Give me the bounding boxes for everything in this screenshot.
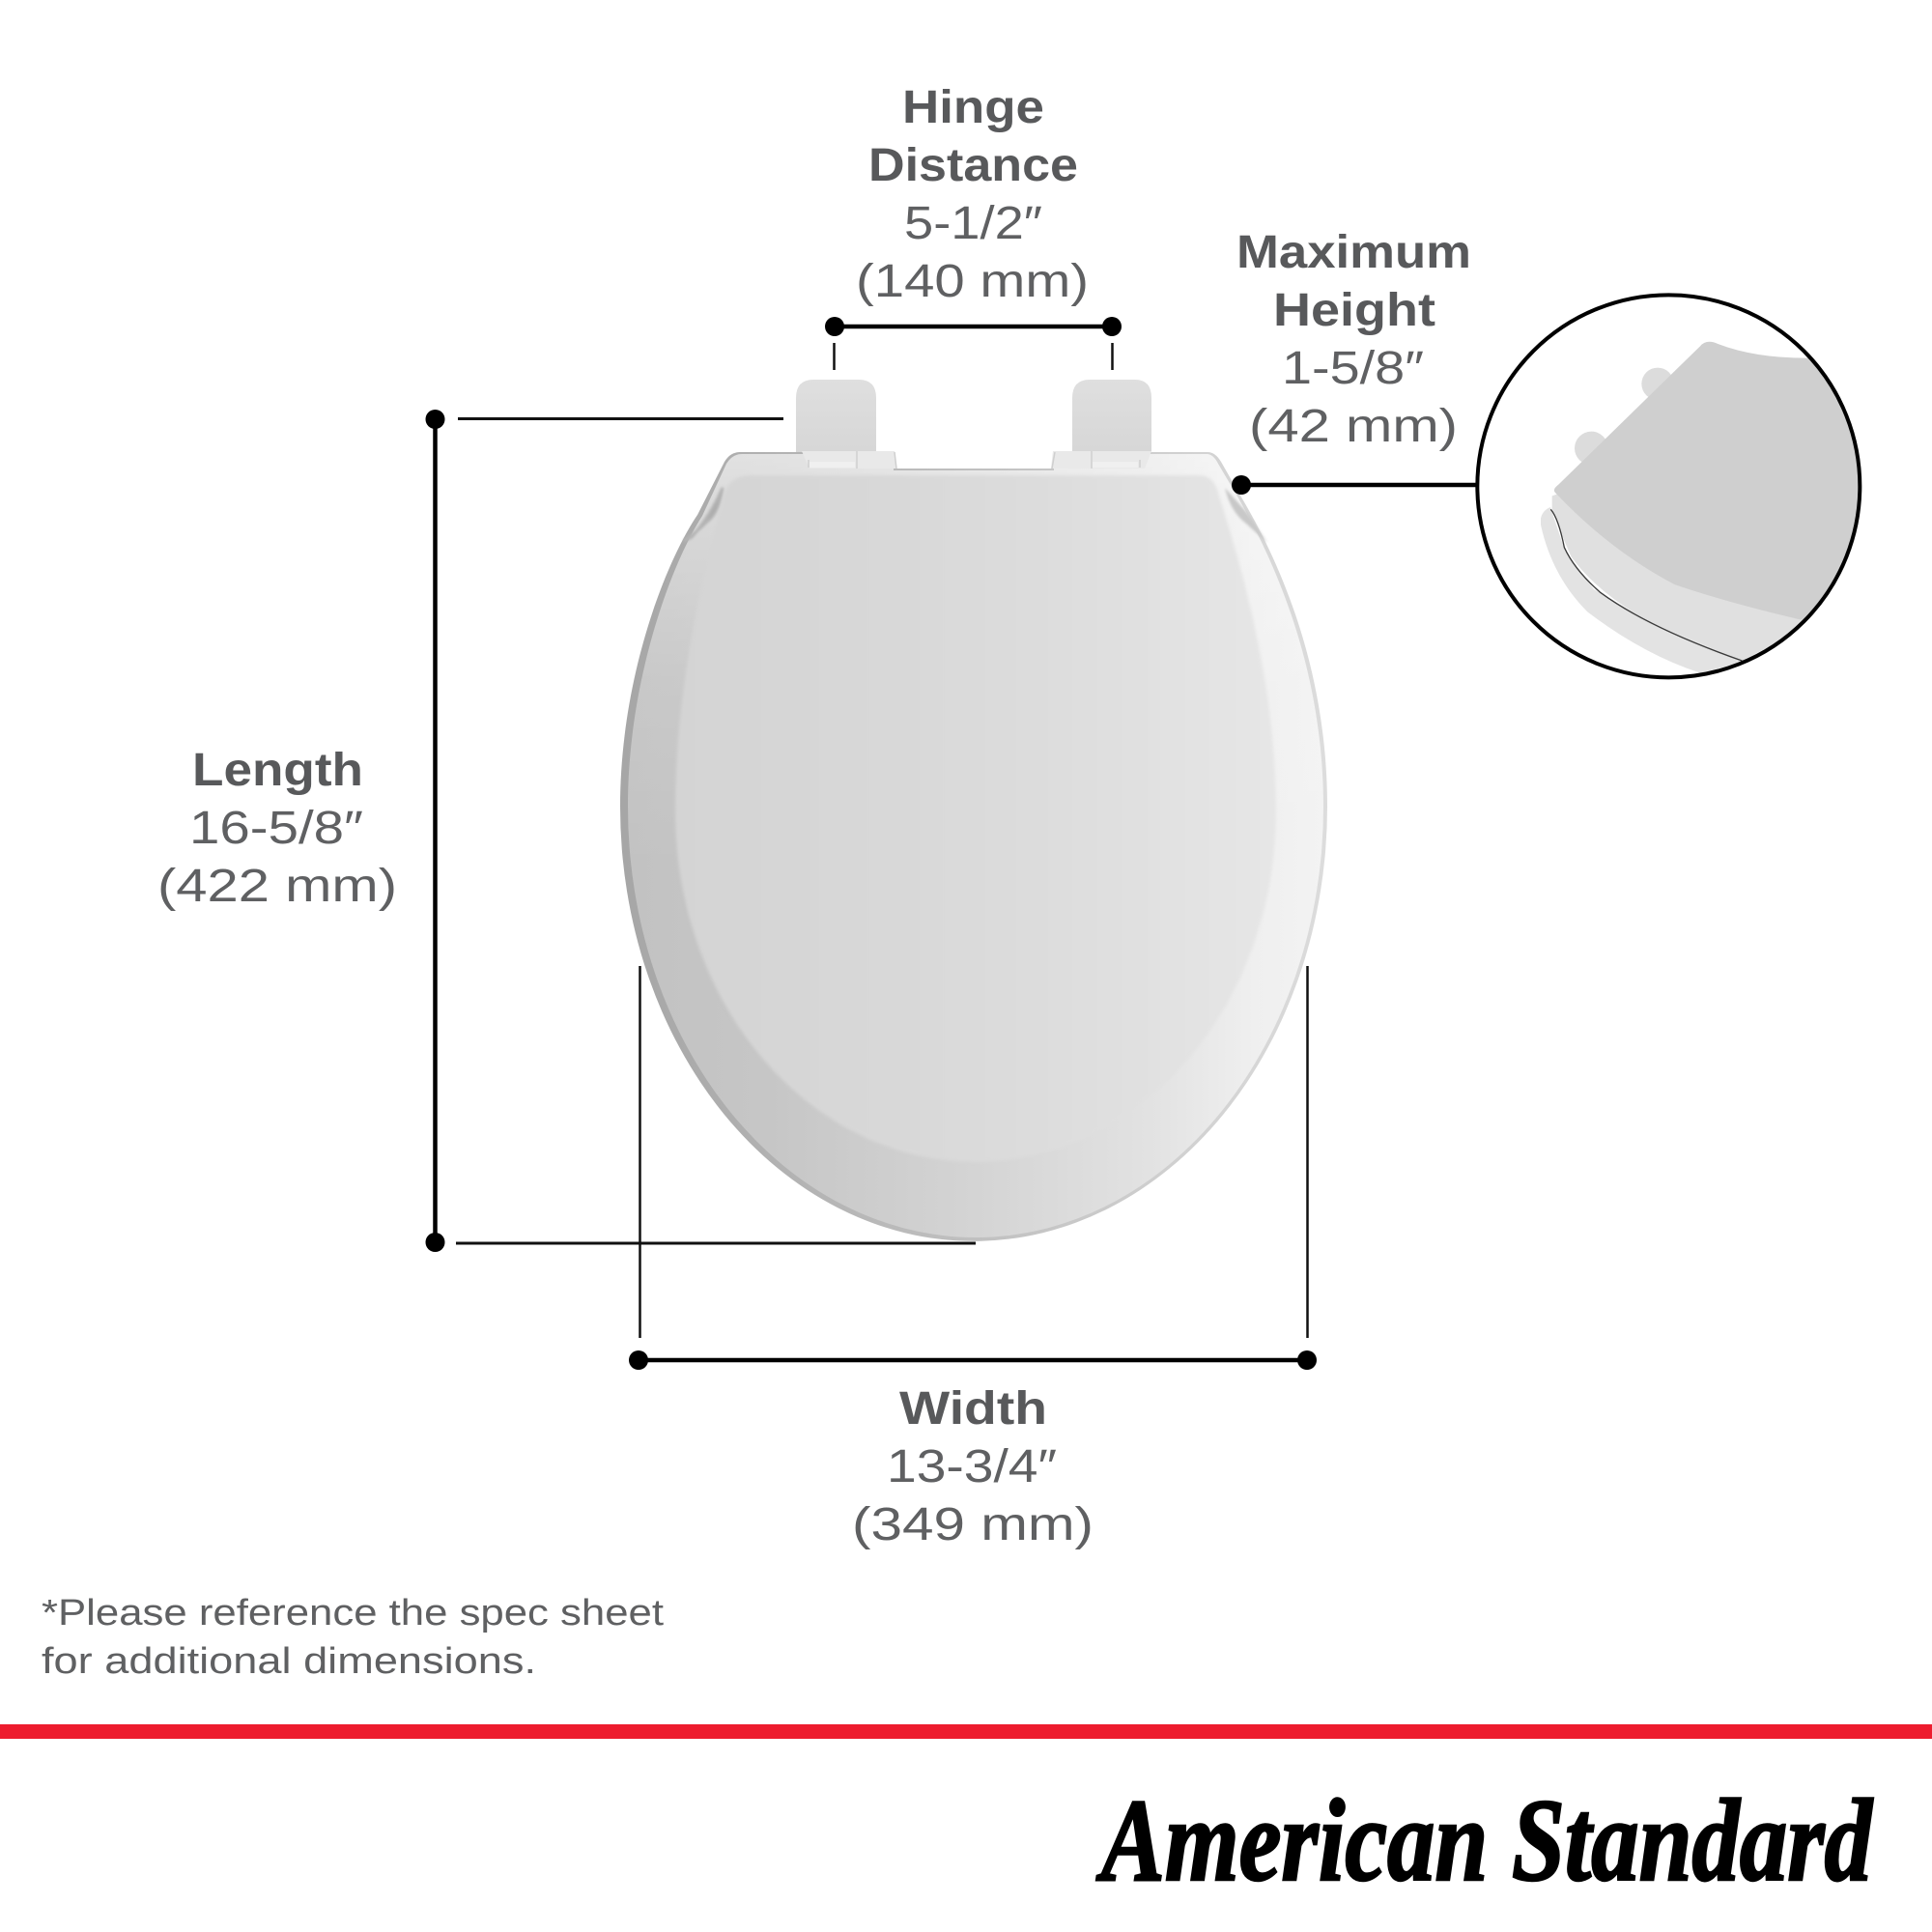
footnote bbox=[42, 1593, 665, 1682]
footnote: for additional dimensions. bbox=[42, 1641, 536, 1682]
left hinge base bbox=[802, 451, 896, 469]
red divider bar bbox=[0, 1724, 1932, 1739]
left bevel shadow wedge bbox=[684, 488, 723, 541]
dimension: hinge distance bbox=[825, 317, 1122, 370]
magnifier contents bbox=[1541, 342, 1867, 673]
seat rim bbox=[620, 452, 1327, 1241]
left hinge bbox=[796, 380, 876, 536]
footnote: *Please reference the spec sheet bbox=[42, 1593, 665, 1634]
label: maximum height: Maximum bbox=[1236, 227, 1471, 278]
toilet seat illustration bbox=[620, 380, 1327, 1241]
label: length: 16-5/8″ bbox=[189, 803, 363, 854]
label: length: Length bbox=[192, 745, 363, 796]
label: hinge distance: Distance bbox=[868, 140, 1078, 191]
label: length: (422 mm) bbox=[157, 861, 397, 912]
label: width bbox=[852, 1383, 1094, 1550]
right hinge base bbox=[1051, 451, 1151, 469]
label: width: 13-3/4″ bbox=[887, 1441, 1057, 1492]
label: maximum height: 1-5/8″ bbox=[1282, 343, 1424, 394]
dimension: width bbox=[629, 966, 1317, 1370]
dimension: length bbox=[425, 410, 976, 1252]
label: hinge distance: 5-1/2″ bbox=[904, 198, 1042, 249]
seat lid bbox=[675, 475, 1276, 1162]
dimension: maximum height leader bbox=[1232, 475, 1478, 495]
label: maximum height: (42 mm) bbox=[1249, 401, 1458, 452]
label: length bbox=[157, 745, 397, 912]
label: width: Width bbox=[899, 1383, 1047, 1435]
label: maximum height bbox=[1236, 227, 1471, 452]
label: width: (349 mm) bbox=[852, 1499, 1094, 1550]
right bevel shadow wedge bbox=[1225, 488, 1267, 543]
label: maximum height: Height bbox=[1273, 285, 1435, 336]
magnified detail circle bbox=[1477, 295, 1867, 677]
label: hinge distance: (140 mm) bbox=[856, 256, 1089, 307]
bevel top highlight bbox=[628, 454, 1323, 1237]
seat bevel bbox=[628, 454, 1323, 1237]
right hinge bbox=[1072, 380, 1151, 536]
magnifier ring bbox=[1477, 295, 1860, 677]
label: hinge distance bbox=[856, 82, 1089, 307]
label: hinge distance: Hinge bbox=[902, 82, 1044, 133]
